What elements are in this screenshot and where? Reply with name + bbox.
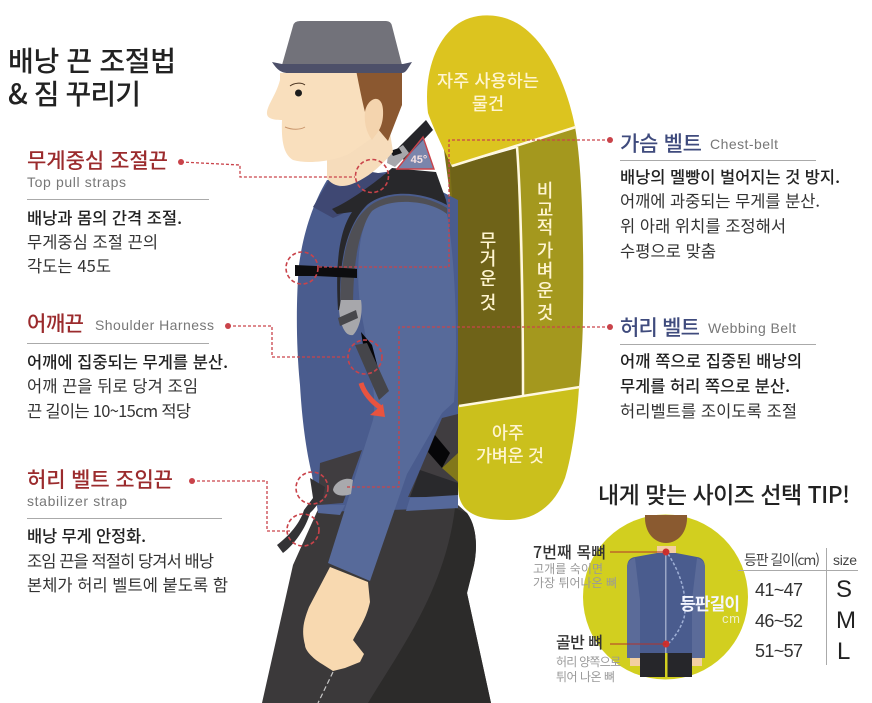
size tip heading: 내게 맞는 사이즈 선택 TIP! (598, 476, 850, 510)
45 degree marker: 45° (411, 154, 427, 166)
collar (313, 172, 390, 218)
guide lines (181, 140, 610, 546)
backpack: 물건 (472, 91, 504, 116)
panel: chest belt: 가슴 벨트 (620, 128, 702, 158)
panel: top pull straps: Top pull straps (27, 174, 126, 190)
harness (332, 168, 447, 310)
trouser seam (318, 672, 333, 703)
size table: S (836, 576, 852, 603)
45 degree marker (397, 137, 434, 169)
panel: stabilizer strap: 본체가 허리 벨트에 붙도록 함 (27, 572, 228, 596)
panel: stabilizer strap: stabilizer strap (27, 493, 127, 509)
size table: M (836, 607, 856, 634)
panel: top pull straps: 배낭과 몸의 간격 조절. (27, 205, 182, 229)
panel: shoulder harness: Shoulder Harness (95, 317, 214, 333)
highlight circles (356, 160, 388, 192)
waist band (317, 495, 458, 515)
back length diagram (583, 514, 748, 680)
label: pelvis: 튀어 나온 뼈 (556, 668, 615, 685)
backpack: 벼 (537, 257, 553, 283)
pack side wedge (428, 113, 456, 240)
backpack: 교 (537, 196, 553, 222)
panel: webbing belt (607, 312, 816, 422)
panel: webbing belt: 허리벨트를 조이도록 조절 (620, 398, 797, 422)
size table (738, 548, 858, 665)
pocket: very light items (458, 387, 579, 520)
panel: shoulder harness: 어깨끈 (27, 308, 84, 338)
backpack: 무 (480, 227, 496, 253)
label: 7th cervical vertebra: 고개를 숙이면 (533, 560, 603, 577)
back length diagram: 등판길이 (680, 590, 740, 615)
lower shoulder strap (361, 332, 378, 368)
back length diagram: cm (722, 611, 740, 626)
title (8, 40, 176, 113)
chest strap (295, 265, 357, 278)
panel: shoulder harness: 어깨 끈을 뒤로 당겨 조임 (27, 373, 198, 397)
backpack: 운 (537, 277, 553, 303)
hat (282, 21, 402, 65)
size table: 41~47 (755, 580, 803, 600)
size table: 46~52 (755, 611, 803, 631)
panel: top pull straps: 무게중심 조절끈 (27, 145, 168, 175)
backpack: 적 (537, 214, 553, 240)
hand (303, 567, 370, 671)
ear (365, 99, 383, 140)
panel: stabilizer strap: 허리 벨트 조임끈 (27, 464, 173, 494)
pocket: frequently used items (427, 15, 575, 166)
backpack: 가벼운 것 (476, 443, 544, 468)
panel: shoulder harness: 끈 길이는 10~15cm 적당 (27, 398, 191, 422)
size table: 51~57 (755, 641, 803, 661)
panel: chest belt: 어깨에 과중되는 무게를 분산. (620, 188, 820, 212)
panel: chest belt: 배낭의 멜빵이 벌어지는 것 방지. (620, 164, 840, 188)
size table: L (837, 638, 850, 665)
hair (350, 70, 402, 141)
title: 배낭 끈 조절법 (8, 40, 176, 80)
panel: size tip (533, 476, 858, 685)
label: pelvis: 골반 뼈 (556, 629, 603, 653)
head (267, 21, 412, 186)
label: 7th cervical vertebra: 가장 튀어나온 뼈 (533, 574, 617, 591)
panel: chest belt (607, 128, 840, 262)
panel: webbing belt: Webbing Belt (708, 320, 796, 336)
backpack (427, 15, 583, 520)
trousers (262, 505, 491, 703)
belt pad (318, 450, 362, 505)
panel: top pull straps: 각도는 45도 (27, 253, 111, 277)
belt buckle (333, 479, 353, 496)
shoulder buckle (339, 300, 362, 335)
top pull strap (394, 120, 433, 160)
label: pelvis: 허리 양쪽으로 (556, 653, 621, 670)
face (267, 70, 372, 162)
title: & 짐 꾸리기 (8, 73, 141, 113)
stabilizer strap (277, 478, 325, 553)
backpack: 가 (537, 237, 554, 263)
panel: stabilizer strap: 조임 끈을 적절히 당겨서 배낭 (27, 548, 214, 572)
backpack: 것 (537, 299, 553, 325)
backpack: 자주 사용하는 (437, 68, 539, 93)
panel: top pull straps (27, 145, 209, 277)
panel: chest belt: Chest-belt (710, 136, 778, 152)
size table: 등판 길이(cm) (744, 550, 820, 570)
panel: stabilizer strap (27, 464, 228, 596)
torso (297, 170, 458, 512)
eye (295, 90, 302, 96)
panel: webbing belt: 어깨 쪽으로 집중된 배낭의 (620, 348, 802, 372)
pocket: relatively light items (517, 127, 583, 396)
back leg shade (368, 508, 491, 703)
panel: webbing belt: 허리 벨트 (620, 312, 700, 342)
arm (328, 202, 456, 581)
panel: chest belt: 수평으로 맞춤 (620, 238, 716, 262)
backpack: 것 (480, 289, 496, 315)
label: pelvis (556, 629, 621, 685)
label: 7th cervical vertebra (533, 539, 617, 591)
arrow: pull direction (361, 383, 385, 417)
label: 7th cervical vertebra: 7번째 목뼈 (533, 539, 606, 563)
backpack: 거 (480, 245, 496, 271)
panel: shoulder harness (27, 308, 231, 422)
panel: chest belt: 위 아래 위치를 조정해서 (620, 213, 786, 237)
hiker figure (262, 21, 491, 703)
panel: top pull straps: 무게중심 조절 끈의 (27, 229, 158, 253)
panel: stabilizer strap: 배낭 무게 안정화. (27, 523, 146, 547)
neck (327, 100, 393, 186)
backpack: 비 (537, 177, 553, 203)
backpack: 아주 (492, 420, 524, 445)
panel: shoulder harness: 어깨에 집중되는 무게를 분산. (27, 349, 228, 373)
size table: size (833, 552, 857, 568)
backpack: 운 (480, 265, 496, 291)
pocket: heavy items (450, 148, 525, 406)
panel: webbing belt: 무게를 허리 쪽으로 분산. (620, 373, 790, 397)
